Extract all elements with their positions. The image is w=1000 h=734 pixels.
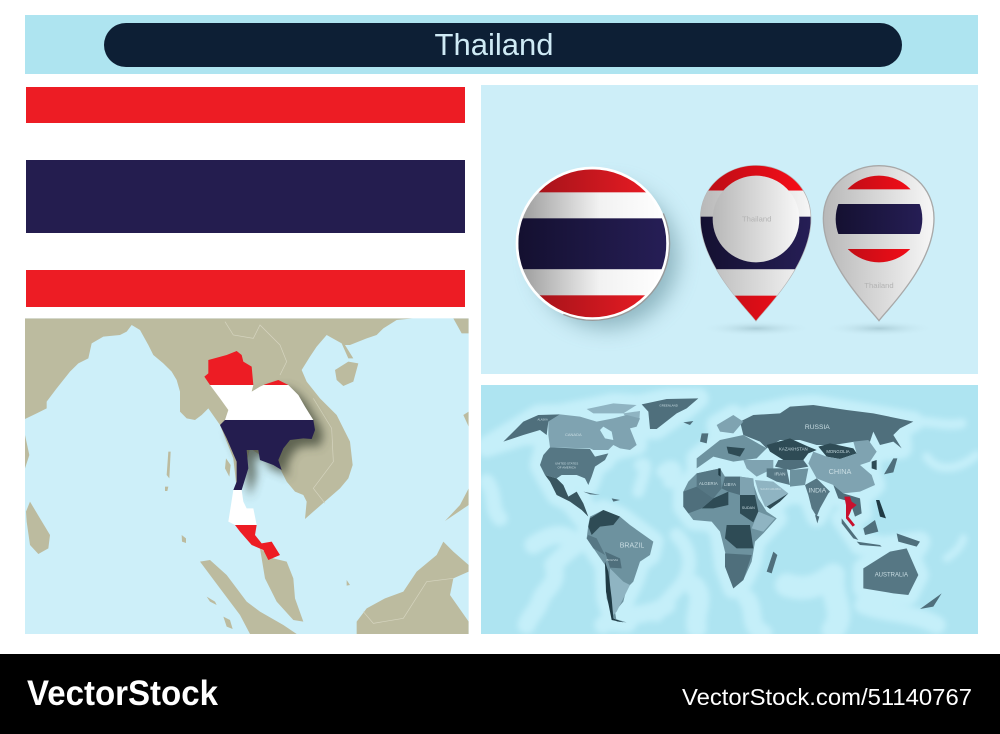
Kazakhstan — [767, 438, 817, 460]
Korea and Japan — [872, 460, 877, 470]
footer brand: VectorStock — [27, 674, 219, 713]
country labels: BOLIVIA — [607, 558, 618, 562]
country labels: IRAN — [774, 472, 786, 477]
grey map pin with flag disc — [822, 166, 936, 336]
Sri Lanka — [815, 515, 819, 523]
pin label: Thailand — [742, 215, 771, 224]
Scandinavia — [717, 415, 743, 433]
Australia — [863, 548, 918, 595]
country labels: MONGOLIA — [826, 449, 850, 454]
country labels: CHINA — [829, 467, 852, 476]
country labels: UNITED STATES — [555, 461, 578, 465]
Southeast Asia — [833, 485, 862, 517]
country labels: INDIA — [808, 487, 827, 494]
title pill — [104, 23, 902, 67]
country labels: BRAZIL — [620, 543, 644, 550]
Russia — [740, 405, 913, 448]
circular flag badge — [516, 167, 678, 328]
surrounding land masses — [25, 318, 469, 634]
Middle East — [743, 460, 773, 477]
pin centre disc — [713, 176, 799, 262]
United States — [540, 447, 608, 485]
Greenland — [642, 398, 698, 429]
Mexico and Central America — [545, 475, 588, 517]
New Zealand — [920, 593, 942, 609]
country labels: OF AMERICA — [557, 465, 576, 469]
Africa — [683, 468, 777, 588]
India — [805, 478, 830, 517]
ocean depth contours — [487, 398, 977, 633]
country labels: CANADA — [565, 432, 582, 437]
country labels: SUDAN — [742, 506, 755, 510]
Thailand shaped flag — [200, 348, 320, 562]
UK and Iceland — [683, 421, 693, 425]
Canada — [548, 414, 640, 450]
border lines — [225, 322, 453, 623]
map pin with flag stripes — [699, 163, 813, 336]
continents — [487, 398, 942, 622]
Hudson Bay — [600, 427, 613, 440]
panel: regional map of Thailand — [25, 318, 469, 634]
panel: world map — [481, 385, 978, 634]
title banner — [25, 15, 978, 74]
country labels — [537, 404, 908, 578]
China — [808, 440, 877, 493]
pin label: Thailand — [864, 281, 894, 290]
country labels: KAZAKHSTAN — [779, 447, 808, 452]
country labels: ALASKA — [537, 417, 548, 421]
footer image id: VectorStock.com/51140767 — [682, 684, 972, 710]
country labels: AUSTRALIA — [875, 572, 908, 578]
country labels: RUSSIA — [805, 424, 830, 431]
Arctic islands — [587, 403, 640, 420]
Alaska — [504, 414, 560, 442]
Mongolia — [818, 443, 857, 459]
country labels: LIBYA — [724, 482, 736, 487]
panel: pins and badge — [481, 85, 978, 374]
country labels: GREENLAND — [659, 404, 679, 408]
Thailand highlight — [844, 497, 857, 527]
pin flag disc — [833, 175, 925, 263]
country labels: ALGERIA — [699, 481, 718, 486]
map shadow of Thailand — [228, 387, 323, 497]
footer bar — [0, 654, 1000, 734]
flag of Thailand — [26, 87, 465, 307]
country labels: SAUDI ARABIA — [760, 487, 781, 491]
title text: Thailand — [434, 27, 554, 62]
Madagascar — [767, 552, 777, 573]
South America — [587, 510, 653, 622]
Europe — [697, 435, 767, 468]
Caribbean — [583, 492, 620, 502]
